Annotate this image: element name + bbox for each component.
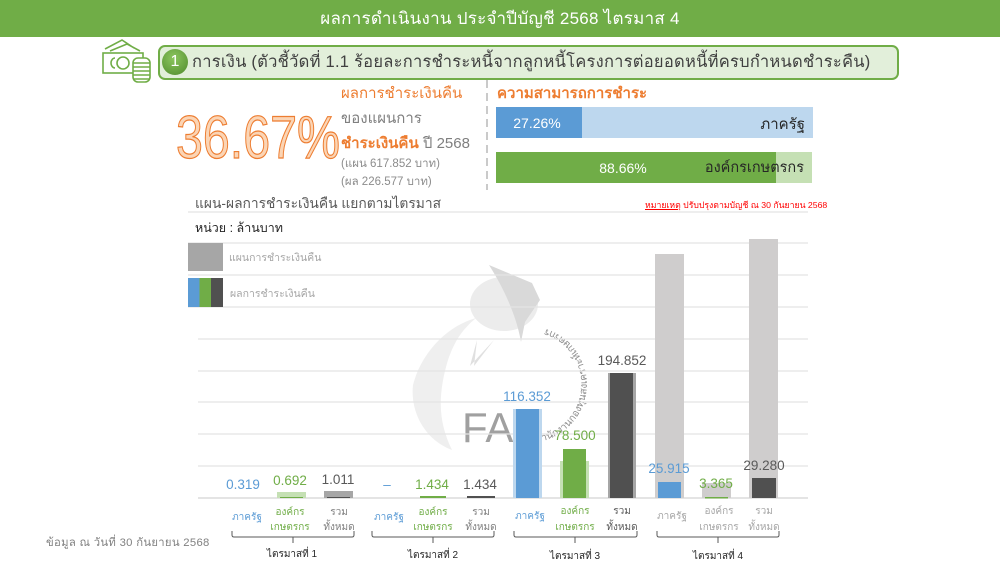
category labels: ภาครัฐ <box>374 512 404 523</box>
quarter 3 bars: 78.500 <box>554 428 596 443</box>
category labels: ภาครัฐ <box>515 511 545 522</box>
legend: actual: ผลการชำระเงินคืน <box>230 287 315 300</box>
quarter 2 bars: – <box>383 477 391 492</box>
category labels: องค์กร <box>418 506 448 518</box>
icon: money and coins <box>102 39 151 83</box>
category labels: เกษตรกร <box>699 522 739 533</box>
bar: government sector <box>496 107 813 138</box>
red note: หมายเหตุ ปรับปรุงตามบัญชี ณ 30 กันยายน 2568 <box>645 200 827 210</box>
quarter 2 bars <box>383 477 497 498</box>
title banner: ผลการดำเนินงาน ประจำปีบัญชี 2568 ไตรมาส 4 <box>320 9 680 28</box>
government label: ภาครัฐ <box>760 116 805 133</box>
category labels: องค์กร <box>704 505 734 517</box>
watermark logo <box>412 265 587 451</box>
quarter labels: ไตรมาสที่ 1 <box>266 546 318 560</box>
watermark logo: FA <box>462 404 513 451</box>
quarter 1 bars: 0.692 <box>273 473 307 488</box>
category labels: องค์กร <box>560 505 590 517</box>
capability heading: ความสามารถการชำระ <box>497 85 647 102</box>
category labels: องค์กร <box>275 506 305 518</box>
unit label: หน่วย : ล้านบาท <box>195 221 283 235</box>
farmer label: องค์กรเกษตรกร <box>705 160 804 176</box>
quarter 3 bars <box>503 353 646 498</box>
category labels: เกษตรกร <box>413 522 453 533</box>
number badge <box>162 49 188 75</box>
quarter 1 bars: 1.011 <box>322 472 354 487</box>
data date footnote: ข้อมูล ณ วันที่ 30 กันยายน 2568 <box>46 537 210 549</box>
plan amount: (แผน 617.852 บาท) <box>341 158 440 170</box>
number badge: 1 <box>171 53 179 70</box>
category labels: ทั้งหมด <box>465 519 497 533</box>
farmer value <box>496 152 776 183</box>
category labels <box>232 505 780 533</box>
quarter 4 bars: 25.915 <box>648 461 690 476</box>
government value: 27.26% <box>513 115 561 131</box>
quarter labels <box>266 546 744 562</box>
category labels: ทั้งหมด <box>606 519 638 533</box>
section heading bar <box>158 45 899 80</box>
category labels: รวม <box>755 506 773 517</box>
watermark logo: สำนักงานกองทุนสงเคราะห์เกษตรกร <box>542 329 587 440</box>
quarter labels: ไตรมาสที่ 3 <box>549 548 601 562</box>
farmer value: 88.66% <box>599 160 647 176</box>
legend: actual <box>188 278 315 307</box>
title banner <box>0 0 1000 37</box>
quarter brackets <box>232 531 779 543</box>
repayment year: ชำระเงินคืน ปี 2568 <box>341 135 470 152</box>
heading text: การเงิน (ตัวชี้วัดที่ 1.1 ร้อยละการชำระหนี้จากลูกหนี้โครงการต่อยอดหนี้ที่ครบกำหนดชำระคืน) <box>192 53 871 71</box>
result text block <box>341 85 470 188</box>
quarter 4 bars: 29.280 <box>743 458 785 473</box>
quarter 1 bars: 0.319 <box>226 477 260 492</box>
quarter labels: ไตรมาสที่ 4 <box>692 548 744 562</box>
result amount: (ผล 226.577 บาท) <box>341 176 432 188</box>
result heading: ผลการชำระเงินคืน <box>341 85 462 102</box>
quarter 1 bars <box>226 472 354 498</box>
quarter 3 bars: 116.352 <box>503 389 551 404</box>
chart heading: แผน-ผลการชำระเงินคืน แยกตามไตรมาส <box>195 196 441 211</box>
quarter labels: ไตรมาสที่ 2 <box>407 547 459 561</box>
bar: farmer organisations <box>496 152 812 183</box>
legend: plan <box>188 243 321 271</box>
legend: plan: แผนการชำระเงินคืน <box>229 251 321 264</box>
of plan: ของแผนการ <box>341 110 422 127</box>
category labels: ภาครัฐ <box>232 512 262 523</box>
category labels: รวม <box>613 506 631 517</box>
category labels: เกษตรกร <box>270 522 310 533</box>
category labels: ภาครัฐ <box>657 511 687 522</box>
quarter 3 bars: 194.852 <box>598 353 646 368</box>
government value <box>496 107 582 138</box>
category labels: เกษตรกร <box>555 522 595 533</box>
quarter 2 bars: 1.434 <box>463 477 497 492</box>
category labels: ทั้งหมด <box>748 519 780 533</box>
quarter 4 bars: 3.365 <box>699 476 733 491</box>
category labels: รวม <box>330 507 348 518</box>
category labels: รวม <box>472 507 490 518</box>
quarter 4 bars <box>648 239 785 498</box>
category labels: ทั้งหมด <box>323 519 355 533</box>
quarter 2 bars: 1.434 <box>415 477 449 492</box>
